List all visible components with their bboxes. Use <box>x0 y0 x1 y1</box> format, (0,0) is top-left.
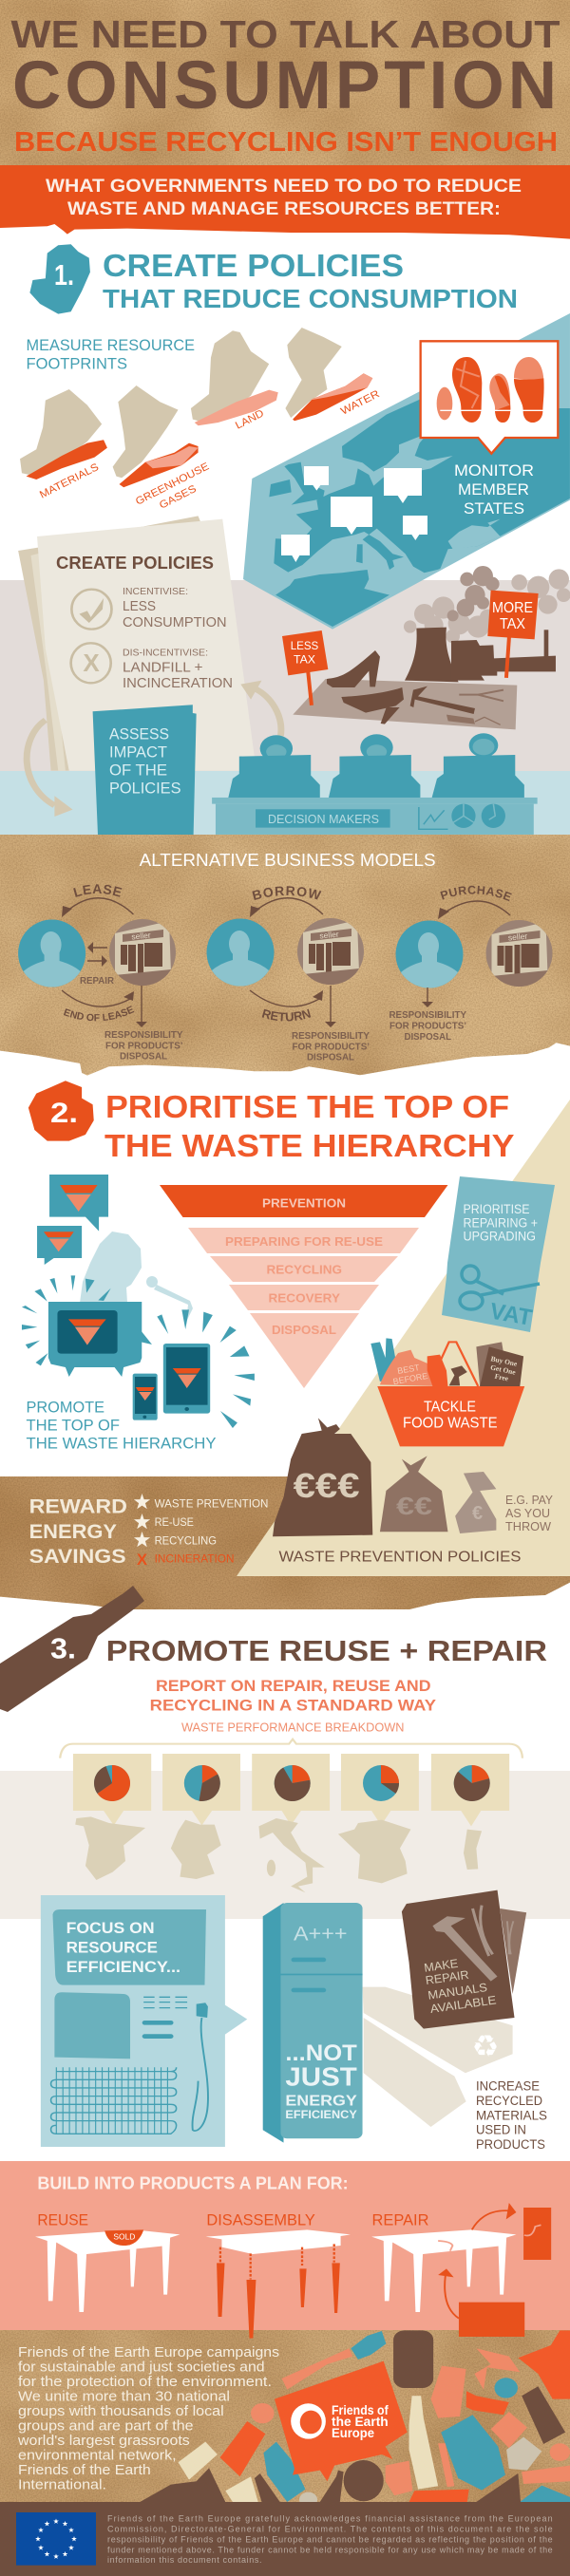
model: lease: seller <box>131 931 151 941</box>
increase recycled materials label: USED IN <box>476 2123 526 2137</box>
prioritise repairing panel: REPAIRING + <box>464 1216 538 1231</box>
cream triangle <box>237 1100 570 1576</box>
report subheading: RECYCLING IN A STANDARD WAY <box>150 1698 436 1715</box>
food basket: BEST <box>397 1363 421 1376</box>
monitor member states callout: MONITOR <box>454 461 534 479</box>
model: borrow: FOR PRODUCTS’ <box>293 1041 370 1052</box>
policy document: INCENTIVISE: <box>123 587 188 597</box>
repair manual <box>402 1890 526 2029</box>
food basket: Buy One <box>490 1354 519 1368</box>
heading 1: CREATE POLICIES <box>103 248 404 283</box>
less tax sign: LESS <box>291 640 319 652</box>
assess impact panel: ASSESS <box>109 725 169 743</box>
heading 2: THE WASTE HIERARCHY <box>104 1129 515 1164</box>
waste hierarchy pyramid <box>160 1185 448 1388</box>
model: borrow: DISPOSAL <box>307 1052 355 1063</box>
subtitle: BECAUSE RECYCLING ISN’T ENOUGH <box>14 127 558 158</box>
money bags: €€ <box>396 1492 432 1520</box>
TV, phone and tablet <box>22 1275 255 1428</box>
funding disclaimer <box>107 2514 553 2565</box>
increase recycled materials label: MATERIALS <box>476 2108 547 2122</box>
header: paper background <box>0 0 570 171</box>
footer bar <box>0 2502 570 2576</box>
funding disclaimer: responsibility of Friends of the Earth Europe and cannot be regarded as reflecting the position of the <box>107 2534 553 2544</box>
section 1 band: grey <box>0 580 570 771</box>
alt models heading: ALTERNATIVE BUSINESS MODELS <box>140 851 436 870</box>
money bags: AS YOU <box>505 1507 550 1520</box>
food basket <box>370 1338 524 1446</box>
main title: WE NEED TO TALK ABOUT <box>11 12 560 56</box>
main title <box>11 12 560 123</box>
badge 2 <box>28 1081 94 1141</box>
Friends of the Earth description: for the protection of the environment. <box>18 2374 272 2390</box>
build into products panel: REPAIR <box>372 2210 429 2228</box>
prioritise repairing panel <box>442 1176 555 1332</box>
Friends of the Earth description: for sustainable and just societies and <box>18 2359 265 2376</box>
model: purchase: RESPONSIBILITY <box>390 1009 466 1021</box>
bottle badge 3 <box>0 1586 144 1712</box>
model: lease: LEASE <box>73 884 122 897</box>
money bags: THROW <box>505 1520 551 1533</box>
Friends of the Earth description: We unite more than 30 national <box>18 2389 230 2404</box>
footprints illustration: GREENHOUSE <box>134 461 211 508</box>
model: lease: FOR PRODUCTS’ <box>105 1041 183 1052</box>
recycled material shape: ♻ <box>472 2028 499 2064</box>
report subheading <box>150 1678 436 1715</box>
assess impact panel <box>93 705 197 842</box>
model: lease: END OF LEASE <box>64 1006 135 1022</box>
increase recycled materials label <box>476 2079 547 2152</box>
Friends of the Earth description <box>17 2344 279 2493</box>
promote label: THE WASTE HIERARCHY <box>27 1436 217 1453</box>
funding disclaimer: information this document contains. <box>107 2555 262 2565</box>
resource efficiency panel: FOCUS ON <box>66 1919 155 1937</box>
reward energy savings: SAVINGS <box>29 1546 126 1568</box>
orange banner: WASTE AND MANAGE RESOURCES BETTER: <box>67 198 501 219</box>
less tax sign: TAX <box>294 653 315 666</box>
more tax sign: MORE <box>492 600 533 616</box>
reward energy savings: RE-USE <box>155 1517 194 1529</box>
model: borrow <box>207 886 370 1063</box>
orange banner: WHAT GOVERNMENTS NEED TO DO TO REDUCE <box>46 176 522 197</box>
food basket: BEFORE <box>392 1371 428 1386</box>
money bags: WASTE PREVENTION POLICIES <box>279 1549 521 1565</box>
footprints illustration: MATERIALS <box>38 461 101 501</box>
fridge: ENERGY <box>285 2093 357 2109</box>
resource efficiency panel: RESOURCE <box>66 1938 158 1956</box>
reward energy savings: ENERGY <box>29 1521 117 1543</box>
model: borrow: seller <box>319 930 339 940</box>
waste hierarchy pyramid: DISPOSAL <box>272 1323 336 1337</box>
funding disclaimer: funder mentioned above. The funder cannot be held responsible for any use which may be made of the <box>107 2545 553 2554</box>
prioritise repairing panel: UPGRADING <box>464 1230 536 1244</box>
prioritise repairing panel: PRIORITISE <box>464 1202 530 1216</box>
food basket: FOOD WASTE <box>403 1415 498 1431</box>
repair manual: MAKE <box>423 1957 459 1975</box>
bottle badge 3: 3. <box>50 1632 76 1665</box>
resource efficiency panel <box>41 1895 247 2147</box>
fridge: EFFICIENCY <box>285 2108 357 2121</box>
shoes <box>327 650 380 687</box>
build into products panel: BUILD INTO PRODUCTS A PLAN FOR: <box>37 2174 349 2193</box>
model: borrow: RETURN <box>262 1008 312 1022</box>
heading 1: THAT REDUCE CONSUMPTION <box>103 284 518 313</box>
more tax sign <box>487 591 539 678</box>
monitor member states callout <box>421 341 558 517</box>
country pies panel <box>60 1739 522 1892</box>
policy document: INCINCERATION <box>123 675 233 691</box>
fridge: JUST <box>285 2062 357 2092</box>
report subheading: REPORT ON REPAIR, REUSE AND <box>156 1678 431 1695</box>
EU flag <box>16 2512 96 2566</box>
measure footprints label: FOOTPRINTS <box>27 355 127 372</box>
heading 3: PROMOTE REUSE + REPAIR <box>106 1634 547 1667</box>
fridge <box>263 1903 363 2143</box>
reward panel paper <box>0 1476 570 1609</box>
policy document: CONSUMPTION <box>123 614 226 630</box>
waste hierarchy pyramid: PREPARING FOR RE-USE <box>225 1234 383 1249</box>
less tax sign <box>282 630 328 705</box>
discarded products collage <box>140 2330 570 2508</box>
waste hierarchy pyramid: RECOVERY <box>268 1291 340 1306</box>
section 1 band: pale blue <box>0 771 570 835</box>
repair manual: MANUALS <box>427 1981 488 2003</box>
Friends of the Earth description: groups and are part of the <box>18 2417 194 2435</box>
money bags: € <box>472 1503 483 1524</box>
build into products panel: DISASSEMBLY <box>206 2210 315 2228</box>
Friends of the Earth description: groups with thousands of local <box>18 2403 224 2419</box>
food basket: TACKLE <box>424 1400 476 1416</box>
person with microphone <box>80 1232 193 1322</box>
money bags: E.G. PAY <box>505 1494 554 1507</box>
Friends of the Earth description: Friends of the Earth <box>18 2462 151 2478</box>
model: lease <box>18 884 183 1062</box>
promote label: THE TOP OF <box>27 1418 120 1435</box>
reward energy savings: RECYCLING <box>155 1535 217 1547</box>
speech bubbles <box>37 1175 108 1265</box>
monitor member states callout: MEMBER <box>458 480 529 498</box>
arrows around assessment <box>27 681 281 817</box>
main title: CONSUMPTION <box>12 48 557 123</box>
increase recycled materials label: INCREASE <box>476 2079 540 2094</box>
assess impact panel: POLICIES <box>109 779 180 798</box>
torn paper edge 2 <box>0 1583 570 1659</box>
increase recycled materials label: PRODUCTS <box>476 2137 545 2152</box>
waste hierarchy pyramid: PREVENTION <box>262 1196 346 1210</box>
policy document <box>18 516 256 771</box>
money bags <box>273 1418 554 1565</box>
model: purchase: DISPOSAL <box>405 1031 452 1043</box>
policy document: DIS-INCENTIVISE: <box>123 648 208 659</box>
reward energy savings: INCINERATION <box>155 1554 235 1566</box>
policy document: CREATE POLICIES <box>56 554 214 573</box>
Friends of the Earth logo bubble: the Earth <box>332 2415 389 2429</box>
Friends of the Earth description: Friends of the Earth Europe campaigns <box>18 2344 279 2360</box>
reward energy savings: WASTE PREVENTION <box>155 1499 268 1511</box>
resource efficiency panel: EFFICIENCY... <box>66 1958 180 1976</box>
tax scene: factory, smoke <box>293 566 570 729</box>
repair manual: AVAILABLE <box>429 1993 497 2016</box>
more tax sign: TAX <box>500 616 526 632</box>
model: purchase: FOR PRODUCTS’ <box>390 1020 466 1031</box>
footprints illustration: WATER <box>339 388 382 418</box>
build into products panel: SOLD <box>113 2232 135 2242</box>
policy document: LANDFILL + <box>123 659 203 676</box>
funding disclaimer: Friends of the Earth Europe gratefully acknowledges financial assistance from the European <box>107 2514 553 2524</box>
Friends of the Earth logo bubble: Friends of <box>332 2403 389 2417</box>
Friends of the Earth logo bubble: Europe <box>332 2426 374 2440</box>
build into products panel <box>0 2161 570 2339</box>
model: lease: DISPOSAL <box>120 1050 168 1062</box>
alternative business models panel <box>0 835 570 1081</box>
promote label: PROMOTE <box>27 1399 104 1416</box>
map of Europe panel <box>243 313 570 630</box>
model: purchase <box>390 885 553 1043</box>
beige band <box>0 1771 570 1919</box>
model: lease: RESPONSIBILITY <box>104 1029 182 1041</box>
measure footprints label: MEASURE RESOURCE <box>27 336 195 354</box>
model: borrow: RESPONSIBILITY <box>292 1030 370 1042</box>
decision makers: DECISION MAKERS <box>268 813 379 826</box>
waste performance label: WASTE PERFORMANCE BREAKDOWN <box>181 1720 405 1734</box>
fridge: ...NOT <box>285 2040 357 2066</box>
increase recycled materials label: RECYCLED <box>476 2094 542 2108</box>
reward energy savings: REWARD <box>29 1495 127 1517</box>
promote label <box>27 1399 217 1453</box>
assess impact panel: IMPACT <box>109 743 167 762</box>
prioritise repairing panel: VAT <box>488 1298 534 1331</box>
badge 2: 2. <box>50 1098 78 1129</box>
policy document: X <box>83 649 100 677</box>
footer paper panel <box>0 2330 570 2502</box>
monitor member states callout: STATES <box>464 499 524 517</box>
funding disclaimer: Commission, Directorate-General for Environment. The contents of this document are the sole <box>107 2525 553 2534</box>
torn paper edge <box>0 1043 570 1089</box>
footprints illustration <box>20 328 382 512</box>
heading 2 <box>104 1090 515 1164</box>
build into products panel: REUSE <box>37 2210 88 2228</box>
measure footprints label <box>27 336 195 372</box>
badge 1 <box>29 244 90 314</box>
Friends of the Earth description: International. <box>18 2476 106 2493</box>
money bags: €€€ <box>294 1466 360 1505</box>
model: purchase: seller <box>507 931 528 942</box>
repair manual: REPAIR <box>425 1968 469 1987</box>
heading 1 <box>103 248 518 313</box>
Friends of the Earth description: world's largest grassroots <box>17 2433 190 2449</box>
orange banner <box>0 165 570 239</box>
policy document: LESS <box>123 598 156 614</box>
model: purchase: PURCHASE <box>441 885 512 901</box>
reward energy savings <box>29 1494 268 1569</box>
hammer <box>410 686 475 714</box>
Friends of the Earth description: environmental network, <box>18 2448 177 2463</box>
fridge: A+++ <box>294 1923 348 1945</box>
recycled material shape <box>363 1987 513 2127</box>
waste hierarchy pyramid: RECYCLING <box>266 1263 342 1277</box>
heading 2: PRIORITISE THE TOP OF <box>105 1090 509 1125</box>
Friends of the Earth logo bubble <box>275 2361 408 2481</box>
decision makers <box>212 733 538 835</box>
footprints illustration: GASES <box>158 483 199 512</box>
model: borrow: BORROW <box>252 886 321 900</box>
assess impact panel: OF THE <box>109 762 167 779</box>
food basket: Get One <box>489 1363 517 1377</box>
reward energy savings: X <box>137 1551 148 1569</box>
footprints illustration: LAND <box>234 407 266 432</box>
badge 1: 1. <box>54 258 74 291</box>
model: lease: REPAIR <box>80 975 114 987</box>
food basket: Free <box>494 1372 510 1383</box>
